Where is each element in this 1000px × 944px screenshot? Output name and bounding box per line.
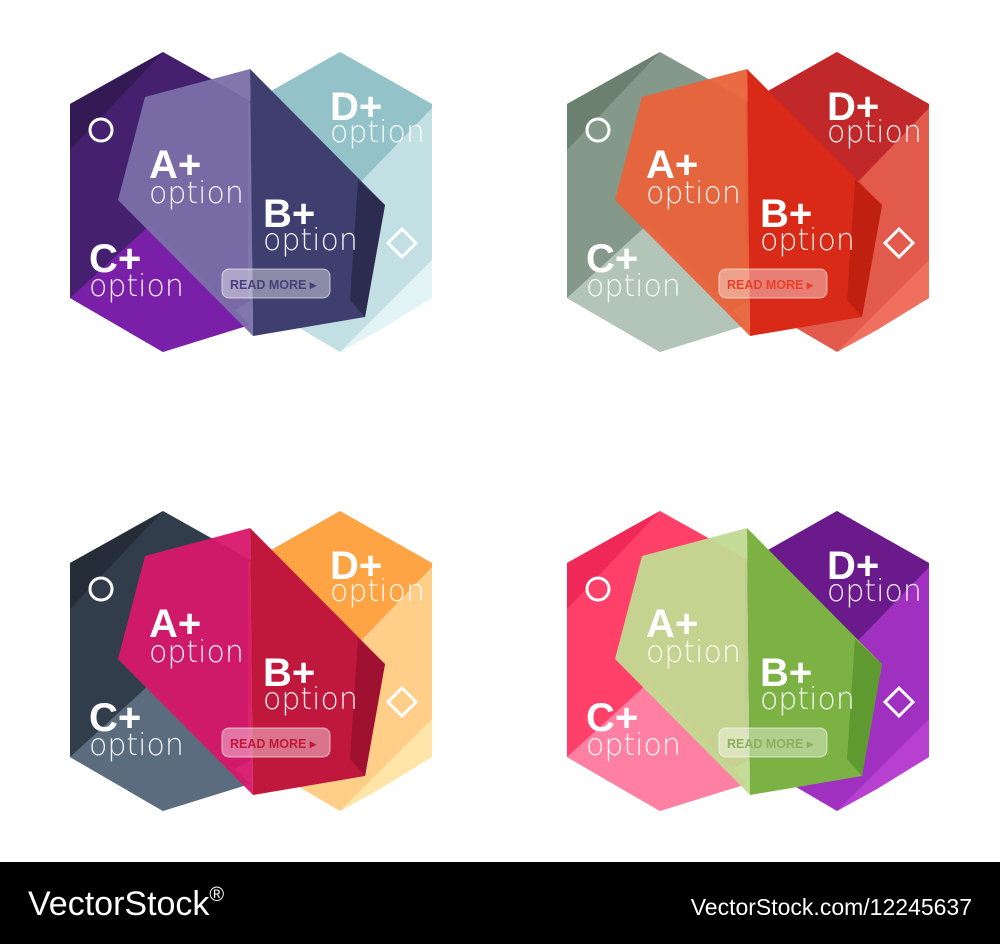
right hexagon <box>745 52 929 352</box>
read more button <box>222 269 330 298</box>
labels: B+ <box>263 192 315 236</box>
labels: B+ <box>760 651 812 695</box>
labels <box>586 544 922 763</box>
labels: option <box>760 682 855 717</box>
labels <box>89 544 425 763</box>
group 2: green/red hexagons <box>567 52 929 352</box>
icon diamond <box>885 229 913 257</box>
labels: option <box>646 635 741 670</box>
left hexagon <box>567 52 753 352</box>
right hexagon <box>248 52 432 352</box>
labels: D+ <box>330 85 382 129</box>
labels: B+ <box>760 192 812 236</box>
labels: D+ <box>330 544 382 588</box>
labels: option <box>149 635 244 670</box>
footer bar <box>0 862 1000 944</box>
labels: option <box>330 115 425 150</box>
labels: option <box>330 574 425 609</box>
icon circle <box>587 119 609 141</box>
middle shape <box>118 528 385 795</box>
icon diamond <box>388 688 416 716</box>
read more button <box>719 269 827 298</box>
labels: A+ <box>646 602 698 646</box>
labels: D+ <box>827 544 879 588</box>
labels: option <box>89 269 184 304</box>
labels: A+ <box>646 143 698 187</box>
left hexagon <box>567 511 753 811</box>
right hexagon <box>248 511 432 811</box>
labels: C+ <box>89 696 141 740</box>
left hexagon <box>70 52 256 352</box>
labels: option <box>827 574 922 609</box>
labels: option <box>89 728 184 763</box>
read more button: READ MORE ▸ <box>230 278 318 292</box>
labels: option <box>263 682 358 717</box>
labels <box>89 85 425 304</box>
labels: C+ <box>586 696 638 740</box>
footer bar: VectorStock <box>28 885 209 923</box>
right hexagon <box>745 511 929 811</box>
labels: D+ <box>827 85 879 129</box>
labels: C+ <box>586 237 638 281</box>
labels <box>586 85 922 304</box>
labels: A+ <box>149 602 201 646</box>
labels: option <box>586 728 681 763</box>
middle shape <box>615 528 882 795</box>
read more button: READ MORE ▸ <box>727 278 815 292</box>
labels: A+ <box>149 143 201 187</box>
read more button <box>222 728 330 757</box>
labels: B+ <box>263 651 315 695</box>
read more button <box>719 728 827 757</box>
middle shape <box>118 69 385 336</box>
read more button: READ MORE ▸ <box>727 737 815 751</box>
labels: option <box>760 223 855 258</box>
labels: C+ <box>89 237 141 281</box>
left hexagon <box>70 511 256 811</box>
middle shape <box>615 69 882 336</box>
labels: option <box>827 115 922 150</box>
icon diamond <box>885 688 913 716</box>
icon circle <box>90 119 112 141</box>
labels: option <box>646 176 741 211</box>
labels: option <box>263 223 358 258</box>
footer bar: ® <box>209 884 224 906</box>
labels: option <box>149 176 244 211</box>
group 4: pink/green/purple hexagons <box>567 511 929 811</box>
group 3: slate/magenta/orange hexagons <box>70 511 432 811</box>
footer bar: VectorStock.com/12245637 <box>691 894 972 920</box>
labels: option <box>586 269 681 304</box>
icon circle <box>587 578 609 600</box>
icon diamond <box>388 229 416 257</box>
read more button: READ MORE ▸ <box>230 737 318 751</box>
icon circle <box>90 578 112 600</box>
group 1: purple/teal hexagons <box>70 52 432 352</box>
